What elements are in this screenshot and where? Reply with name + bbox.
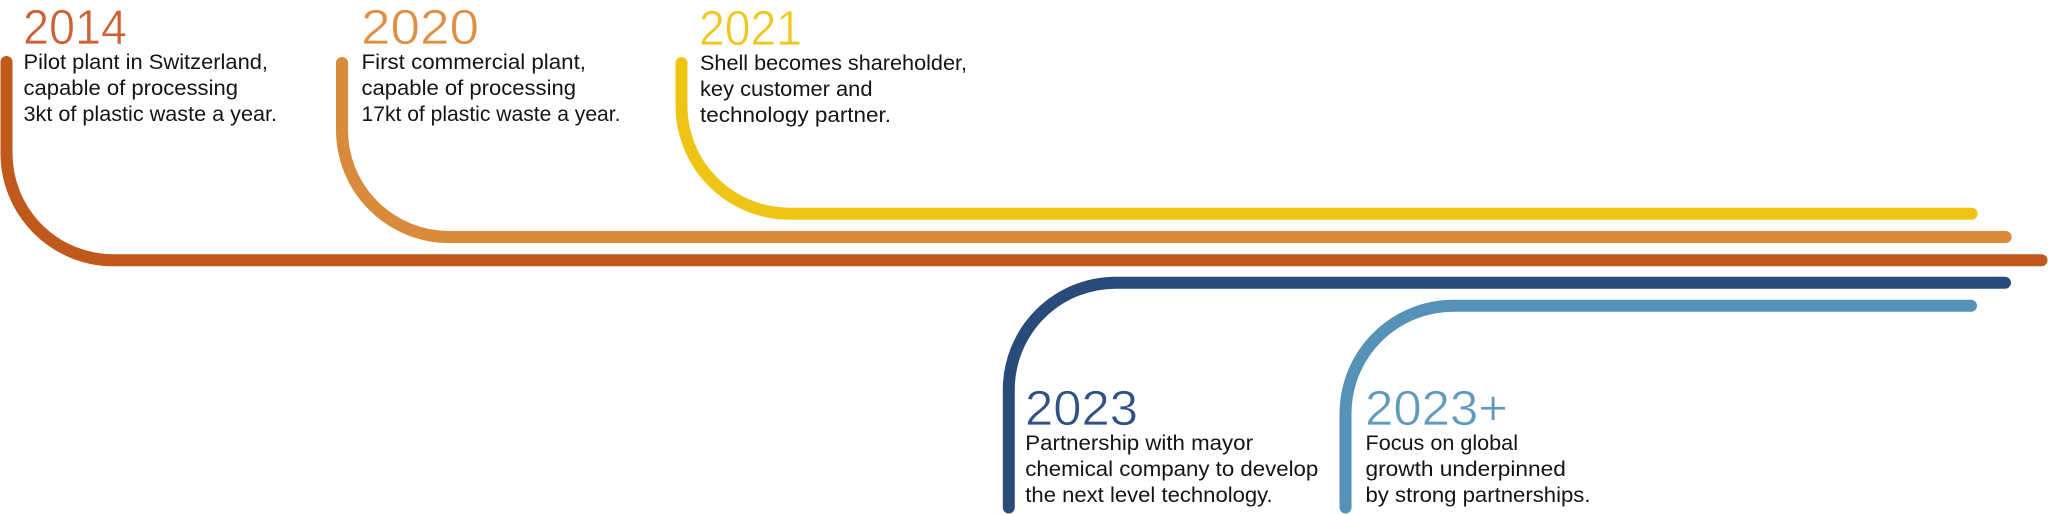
year: 2023+: 2023+ [1365,382,1508,436]
description: 2020: capable of processing [362,76,576,100]
description: 2014 [24,50,277,126]
milestone: 2021 [699,2,967,127]
description: 2023+: Focus on global [1366,431,1518,455]
description: 2023+ [1366,431,1590,507]
description: 2023: chemical company to develop [1025,457,1318,481]
description: 2020: 17kt of plastic waste a year. [362,102,620,126]
year: 2020: 2020 [361,1,479,55]
description: 2021: key customer and [700,77,872,101]
milestone: 2020 [361,1,620,126]
year: 2023: 2023 [1025,382,1138,436]
description: 2021 [700,51,967,127]
line: 2023+ blue [1346,306,1971,508]
line: 2023 navy [1009,283,2005,508]
line: 2021 yellow [682,63,1972,214]
description: 2014: 3kt of plastic waste a year. [24,102,277,126]
milestone: 2023 [1025,382,1318,507]
description: 2014: capable of processing [24,76,238,100]
description: 2021: technology partner. [700,103,891,127]
description: 2023+: growth underpinned [1366,457,1566,481]
description: 2021: Shell becomes shareholder, [700,51,967,75]
description: 2014: Pilot plant in Switzerland, [24,50,268,74]
year: 2014: 2014 [23,1,127,55]
line: 2014 dark orange [6,62,2041,260]
description: 2023 [1025,431,1318,507]
year: 2021: 2021 [699,2,802,56]
milestone: 2023+ [1365,382,1590,507]
description: 2020 [362,50,620,126]
description: 2020: First commercial plant, [362,50,586,74]
description: 2023: Partnership with mayor [1025,431,1253,455]
description: 2023: the next level technology. [1025,483,1273,507]
milestone: 2014 [23,1,277,126]
description: 2023+: by strong partnerships. [1366,483,1590,507]
line: 2020 light orange [342,63,2006,237]
